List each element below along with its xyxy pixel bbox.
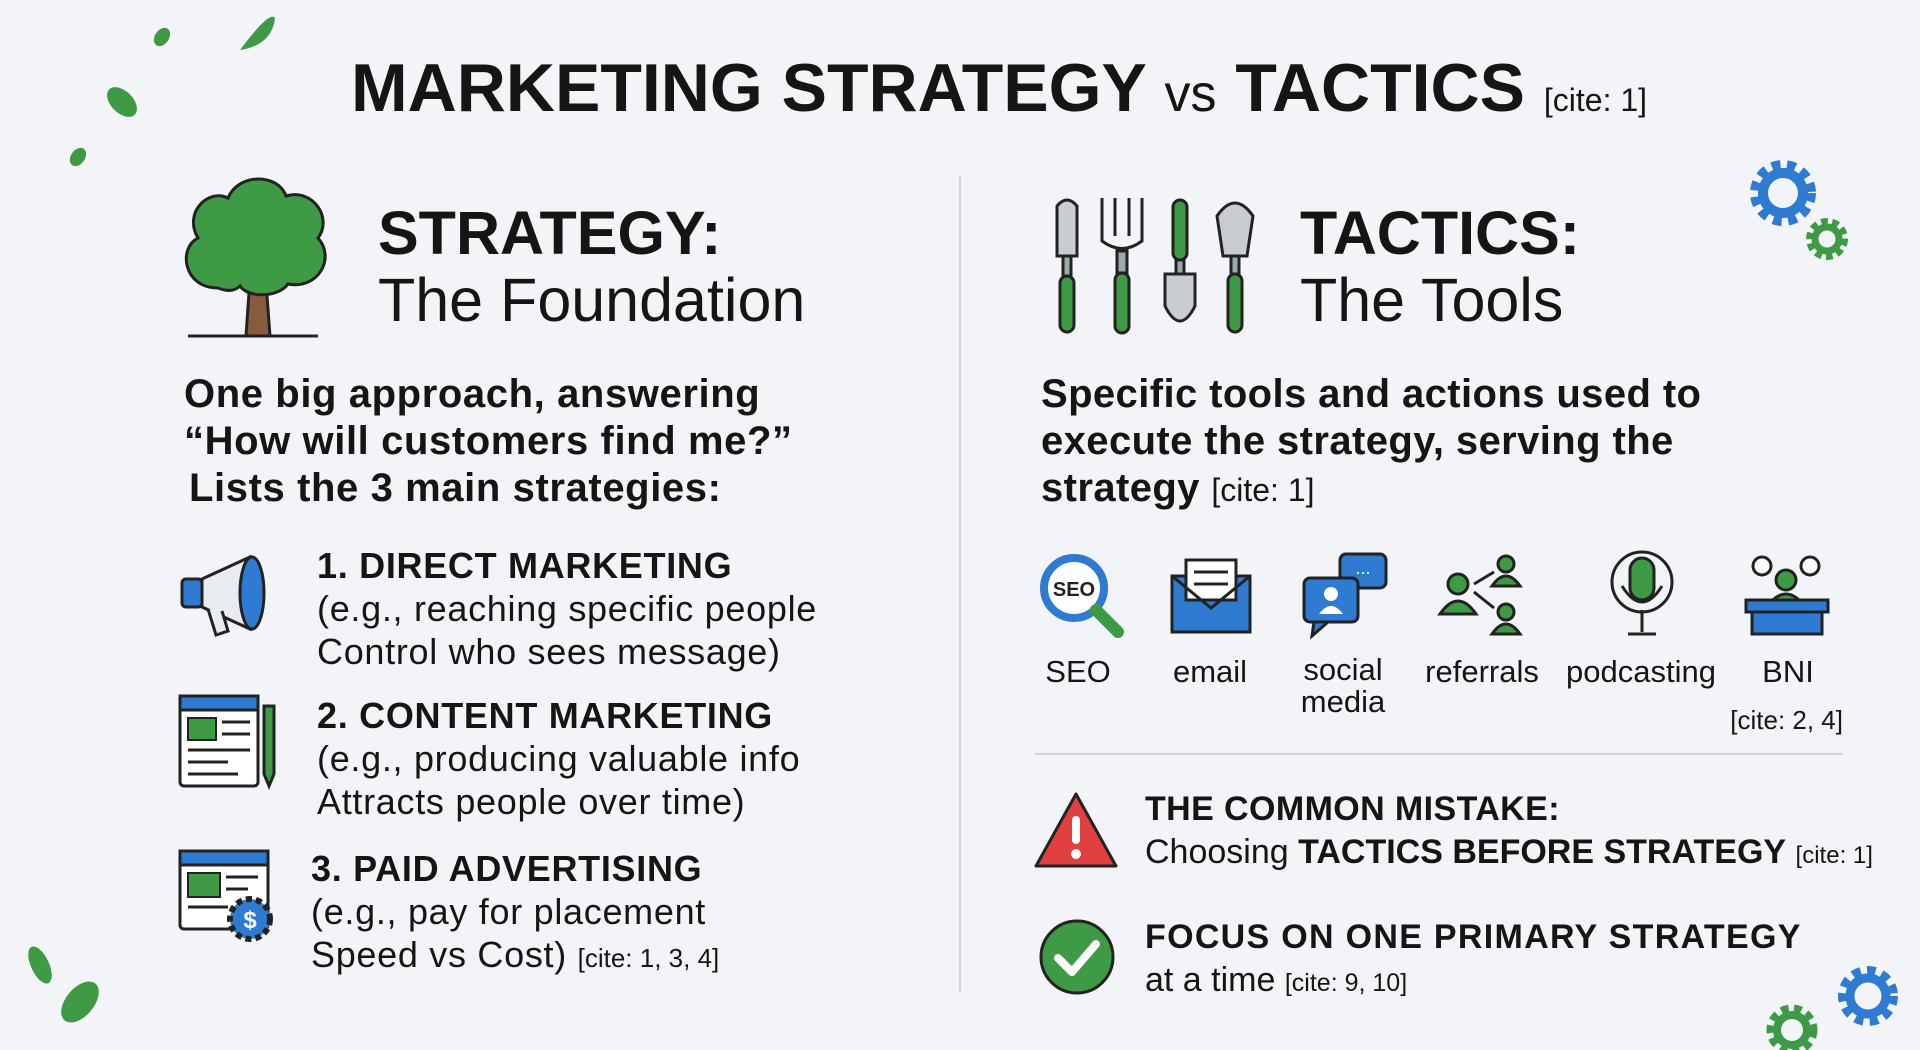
item 2: content marketing: Attracts people over time) bbox=[317, 781, 745, 822]
heading: strategy bbox=[378, 199, 805, 334]
item 2: content marketing: 2. CONTENT MARKETING bbox=[317, 695, 773, 736]
tactics icon row: referrals bbox=[1425, 654, 1539, 689]
heading: tactics bbox=[1300, 199, 1580, 334]
icon: megaphone bbox=[180, 554, 266, 637]
heading: strategy: STRATEGY: bbox=[378, 199, 721, 267]
item 2: content marketing: (e.g., producing valuable info bbox=[317, 738, 800, 779]
text: tactics description: Specific tools and actions used to bbox=[1041, 372, 1701, 416]
item 1: direct marketing: 1. DIRECT MARKETING bbox=[317, 545, 732, 586]
decorative leaves bottom-left bbox=[28, 946, 99, 1022]
tactics icon row: media bbox=[1301, 684, 1385, 719]
icon: BNI bbox=[1744, 556, 1830, 636]
tactics icon row: podcasting bbox=[1566, 654, 1716, 689]
callout: focus: FOCUS ON ONE PRIMARY STRATEGY bbox=[1145, 918, 1802, 956]
callout: common mistake bbox=[1034, 790, 1873, 871]
heading: tactics: TACTICS: bbox=[1300, 199, 1580, 267]
icon: SEO bbox=[1040, 554, 1124, 638]
icon: browser with dollar gear bbox=[178, 850, 273, 942]
callout: focus bbox=[1040, 918, 1802, 999]
icon: referrals bbox=[1437, 554, 1523, 636]
heading: tactics: The Tools bbox=[1300, 266, 1563, 334]
icon: garden tools bbox=[1056, 198, 1255, 334]
item 3: paid advertising: 3. PAID ADVERTISING bbox=[311, 848, 702, 889]
callout: common mistake: Choosing TACTICS BEFORE STRATEGY [cite: 1] bbox=[1145, 833, 1873, 871]
tactics icon row: [cite: 2, 4] bbox=[1730, 705, 1843, 735]
text: strategy description: One big approach, answering bbox=[184, 372, 760, 416]
labels: SEO bbox=[1045, 654, 1111, 689]
divider bbox=[959, 175, 961, 992]
icon: warning bbox=[1034, 792, 1118, 868]
callout: common mistake: THE COMMON MISTAKE: bbox=[1145, 790, 1560, 828]
tactics icon row: email bbox=[1173, 654, 1247, 689]
item 3: paid advertising bbox=[178, 848, 719, 975]
icon: tree bbox=[184, 178, 327, 338]
icon: gears bottom-right bbox=[1766, 966, 1898, 1050]
heading: strategy: The Foundation bbox=[378, 266, 805, 334]
icon: social media: ... bbox=[1355, 558, 1371, 578]
text: strategy description: Lists the 3 main strategies: bbox=[189, 466, 722, 510]
title: MARKETING STRATEGY vs TACTICS [cite: 1] bbox=[351, 50, 1647, 126]
text: tactics description: strategy [cite: 1] bbox=[1041, 466, 1314, 510]
icon: SEO: SEO bbox=[1053, 579, 1095, 601]
item 2: content marketing bbox=[178, 694, 800, 822]
icon: article bbox=[178, 694, 276, 790]
item 1: direct marketing: Control who sees message) bbox=[317, 631, 781, 672]
tactics icon row: BNI bbox=[1762, 654, 1814, 689]
divider horizontal bbox=[1035, 753, 1843, 755]
tactics icon row bbox=[1040, 550, 1843, 735]
item 1: direct marketing bbox=[180, 545, 817, 672]
item 3: paid advertising: (e.g., pay for placement bbox=[311, 891, 706, 932]
icon: browser with dollar gear: $ bbox=[243, 907, 257, 934]
text: strategy description bbox=[184, 372, 793, 510]
tactics icon row: social bbox=[1303, 652, 1383, 687]
item 1: direct marketing: (e.g., reaching specific people bbox=[317, 588, 817, 629]
text: tactics description: execute the strategy, serving the bbox=[1041, 419, 1674, 463]
decorative leaves top-left bbox=[70, 16, 275, 166]
text: strategy description: “How will customers find me?” bbox=[184, 419, 793, 463]
icon: email bbox=[1170, 558, 1252, 634]
callout: focus: at a time [cite: 9, 10] bbox=[1145, 961, 1407, 999]
item 3: paid advertising: Speed vs Cost) [cite: 1, 3, 4] bbox=[311, 934, 719, 975]
icon: social media bbox=[1302, 552, 1388, 640]
icon: podcasting bbox=[1610, 550, 1674, 636]
text: tactics description bbox=[1041, 372, 1701, 510]
icon: gears top-right bbox=[1750, 160, 1848, 260]
icon: check bbox=[1040, 920, 1114, 994]
